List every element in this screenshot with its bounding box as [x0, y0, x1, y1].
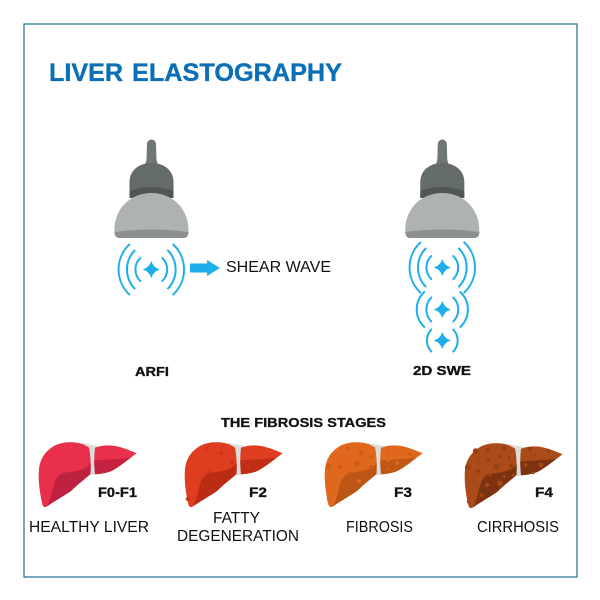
title: ELASTOGRAPHY: [132, 59, 342, 87]
label: 2D SWE: 2D SWE: [413, 363, 471, 378]
label: fatty degeneration: FATTY: [213, 510, 260, 527]
label: healthy liver: HEALTHY LIVER: [29, 519, 149, 536]
arrow: shear wave direction: [190, 260, 220, 276]
icon: fibrosis liver: [325, 442, 423, 507]
title: LIVER: [49, 59, 123, 87]
label: F0-F1: F0-F1: [98, 484, 137, 500]
label: fatty degeneration: DEGENERATION: [177, 528, 299, 545]
icon: 2D SWE shear waves: [410, 242, 475, 352]
label: F3: F3: [394, 484, 412, 500]
label: F2: F2: [249, 484, 267, 500]
label: F4: F4: [535, 484, 553, 500]
label: ARFI: ARFI: [135, 364, 169, 379]
heading: the fibrosis stages: THE FIBROSIS STAGES: [221, 415, 386, 430]
icon: 2D SWE ultrasound probe: [405, 140, 479, 238]
icon: ARFI shear waves: [119, 244, 184, 294]
icon: fatty liver: [185, 442, 283, 507]
icon: cirrhosis liver: [465, 443, 563, 508]
label: shear wave: SHEAR WAVE: [226, 259, 331, 276]
label: cirrhosis: CIRRHOSIS: [477, 519, 559, 536]
icon: ARFI ultrasound probe: [114, 140, 189, 238]
icon: healthy liver: [39, 442, 137, 507]
label: fatty degeneration: [177, 510, 299, 545]
label: fibrosis: FIBROSIS: [346, 519, 413, 536]
